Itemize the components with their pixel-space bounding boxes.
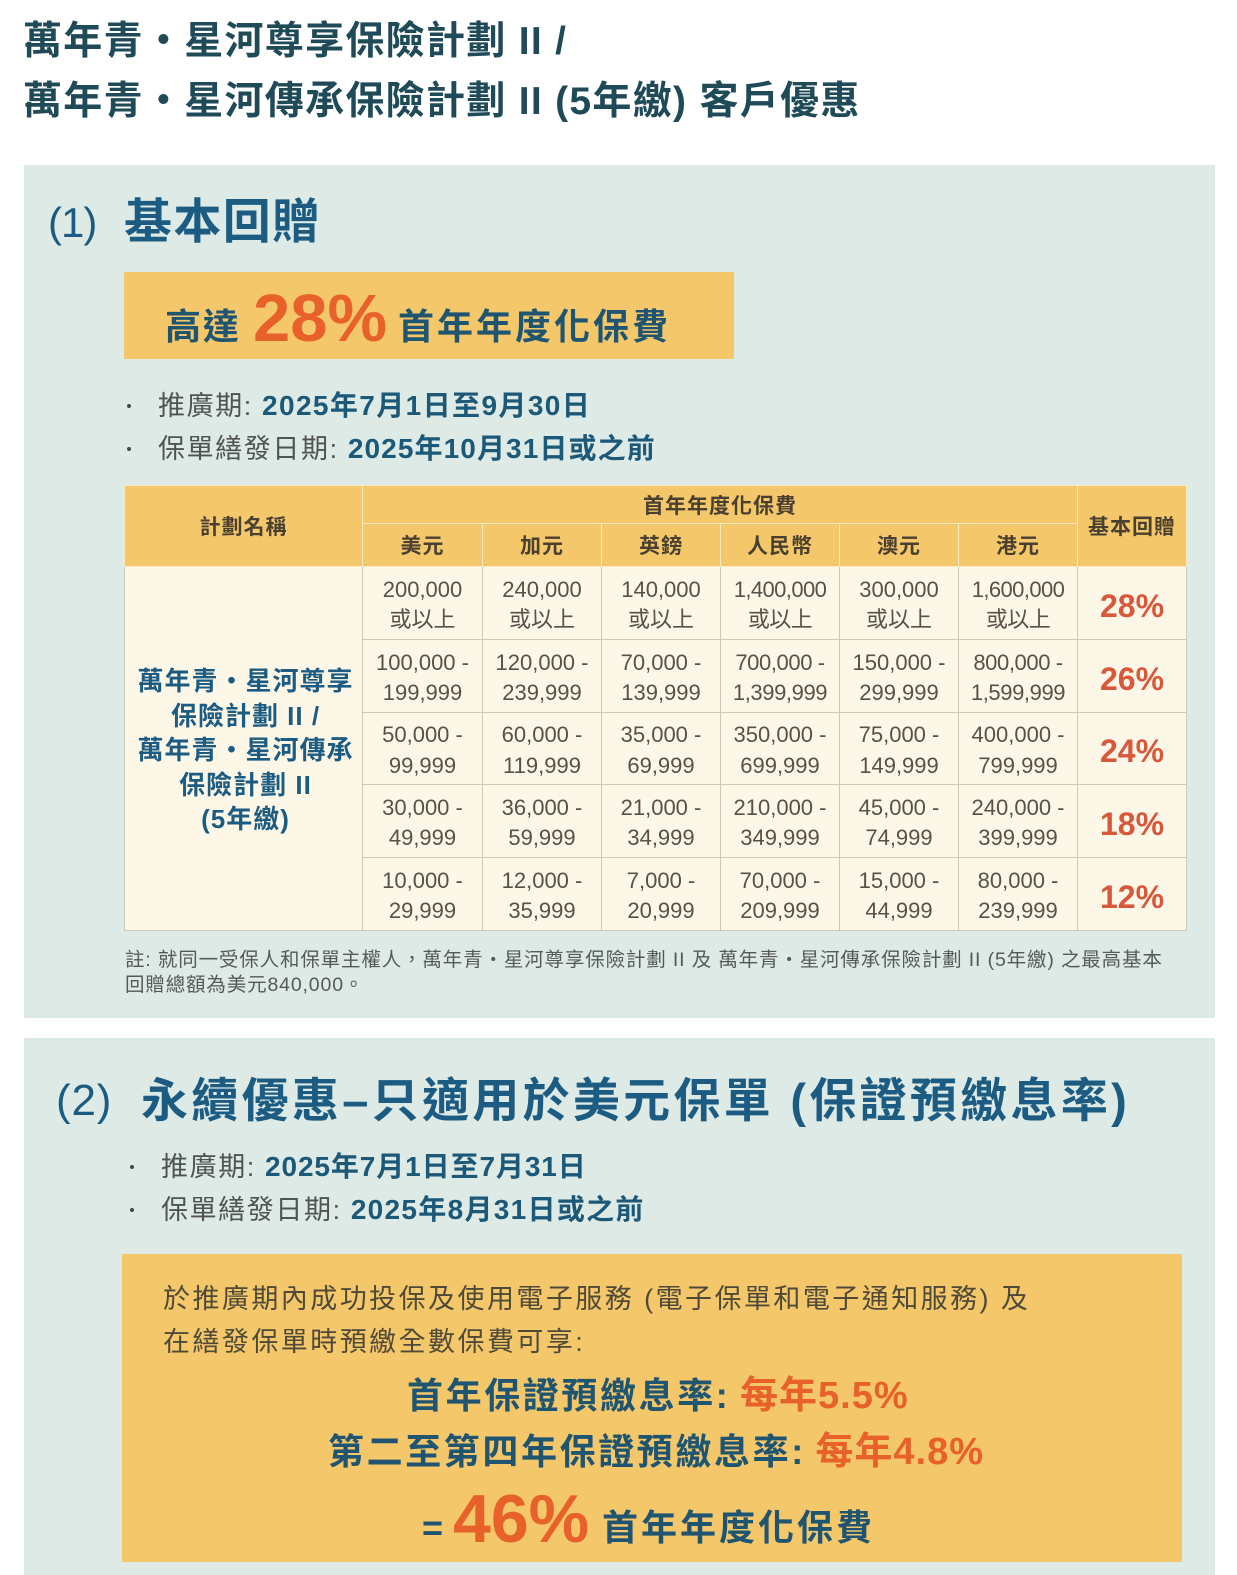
table row: 12% tier: 7,000 -: [627, 868, 695, 892]
table row: 28% tier: 1,400,000: [734, 576, 826, 602]
table row: 26% tier: 239,999: [502, 680, 582, 705]
table row: 26% tier: 26%: [1100, 661, 1164, 697]
equals sign: =: [422, 1507, 443, 1548]
table row: 28% tier: 300,000: [859, 576, 939, 602]
panel: perpetual offer: [24, 1038, 1215, 1575]
46% figure: 46%: [453, 1481, 589, 1557]
table header row 2: currencies: 澳元: [877, 535, 921, 558]
table row: 12% tier: 70,000 -: [740, 868, 820, 892]
footnote: [125, 949, 1163, 996]
table row: 28% tier: 或以上: [866, 607, 932, 632]
table row: 24% tier: 99,999: [389, 752, 456, 778]
table row: 24% tier: 119,999: [503, 752, 581, 778]
table row: 28% tier: 或以上: [389, 607, 456, 632]
table row: 26% tier: 120,000 -: [496, 650, 588, 674]
table row: 12% tier: 12%: [1100, 879, 1164, 915]
table header row 2: currencies: [363, 524, 1077, 566]
table row: 28% tier: 200,000: [383, 576, 462, 602]
table row: 18% tier: 74,999: [865, 825, 933, 850]
table row: 28% tier: 或以上: [628, 607, 694, 632]
footnote: 註: 就同一受保人和保單主權人，萬年青・星河尊享保險計劃 II 及 萬年青・星河傳承保險計劃 II (5年繳) 之最高基本: [125, 949, 1163, 971]
second to fourth year rate: 第二至第四年保證預繳息率: 每年4.8%: [328, 1431, 984, 1473]
table header row 2: currencies: 美元: [400, 535, 444, 558]
table header row 2: currencies: 英鎊: [639, 535, 683, 558]
table header row 1: 計劃名稱: [200, 516, 288, 539]
panel: basic rebate: [24, 165, 1215, 1018]
table row: 28% tier: 140,000: [621, 576, 701, 602]
callout description: [163, 1284, 1030, 1357]
heading: section 1 number: (1): [48, 199, 96, 246]
table row: 12% tier: 35,999: [508, 898, 576, 923]
bullet: promotion period: 推廣期: 2025年7月1日至7月31日: [161, 1151, 587, 1182]
table row: 26% tier: 70,000 -: [621, 650, 701, 674]
table row: 24% tier: 799,999: [978, 752, 1058, 778]
table row: 12% tier: 15,000 -: [859, 868, 939, 892]
table row: 28% tier: 或以上: [986, 607, 1050, 632]
table row: 12% tier: 44,999: [865, 898, 933, 923]
table row: 26% tier: 800,000 -: [973, 650, 1063, 674]
table row: 18% tier: 21,000 -: [621, 794, 701, 820]
table header row 1: [125, 486, 1186, 923]
table row: 28% tier: 240,000: [502, 576, 582, 602]
table row: 28% tier: 28%: [1100, 588, 1164, 624]
table row: 26% tier: 1,399,999: [733, 680, 827, 705]
table row: 12% tier: 12,000 -: [502, 868, 582, 892]
table row: 12% tier: 239,999: [978, 898, 1058, 923]
table row: 18% tier: 45,000 -: [859, 794, 939, 820]
table header row 2: currencies: 港元: [996, 535, 1040, 558]
table row: 26% tier: 199,999: [383, 680, 462, 705]
table row: 24% tier: 60,000 -: [502, 722, 582, 747]
table row: 24% tier: 75,000 -: [859, 722, 939, 747]
table row: 28% tier: 1,600,000: [972, 576, 1064, 602]
table header row 2: currencies: 加元: [520, 535, 564, 558]
table row: 28% tier: 或以上: [748, 607, 812, 632]
table row: 18% tier: 34,999: [627, 825, 695, 850]
table header row 1: 基本回贈: [1088, 516, 1176, 539]
heading: perpetual offer: 永續優惠–只適用於美元保單 (保證預繳息率): [141, 1074, 1130, 1127]
table header row 1: 萬年青・星河傳承: [137, 735, 354, 765]
table row: 24% tier: 35,000 -: [621, 722, 701, 747]
table row: 28% tier: [137, 576, 1164, 834]
callout: prepayment interest: [122, 1254, 1182, 1562]
heading: section 2 number: (2): [56, 1076, 112, 1125]
table row: 26% tier: [376, 650, 1164, 705]
table row: 18% tier: 399,999: [978, 825, 1058, 850]
bullet: policy issue date: 保單繕發日期: 2025年8月31日或之前: [161, 1194, 645, 1225]
table row: 12% tier: 10,000 -: [382, 868, 463, 892]
table row: 18% tier: 18%: [1100, 806, 1164, 842]
table row: 24% tier: 350,000 -: [734, 722, 826, 747]
table row: 24% tier: 149,999: [859, 752, 939, 778]
table row: 18% tier: 210,000 -: [734, 794, 826, 820]
title line 1: 萬年青・星河尊享保險計劃 II /: [23, 20, 567, 63]
table header row 2: currencies: 人民幣: [747, 535, 813, 558]
table row: 24% tier: 24%: [1100, 733, 1164, 769]
table row: 24% tier: 50,000 -: [382, 722, 463, 747]
callout description: 在繕發保單時預繳全數保費可享:: [163, 1327, 585, 1357]
table row: 26% tier: 1,599,999: [971, 680, 1065, 705]
table row: 18% tier: [382, 794, 1164, 850]
table header row 1: 萬年青・星河尊享: [137, 666, 354, 696]
bullet: promotion period: 推廣期: 2025年7月1日至9月30日: [158, 390, 591, 421]
table row: 12% tier: 209,999: [740, 898, 820, 923]
table row: 18% tier: 349,999: [740, 825, 820, 850]
table row: 18% tier: 59,999: [508, 825, 576, 850]
first-year rate: 首年保證預繳息率: 每年5.5%: [407, 1375, 909, 1417]
title: [23, 20, 861, 123]
table row: 26% tier: 150,000 -: [853, 650, 945, 674]
rebate table: [124, 485, 1187, 931]
table row: 24% tier: [382, 722, 1164, 778]
bullet: policy issue date: 保單繕發日期: 2025年10月31日或之前: [158, 433, 656, 464]
table row: 24% tier: 400,000 -: [972, 722, 1064, 747]
callout figure: 28%: [253, 281, 387, 356]
table header row 1: 首年年度化保費: [643, 494, 797, 518]
table row: 24% tier: 699,999: [740, 752, 820, 778]
table row: 26% tier: 139,999: [621, 680, 701, 705]
total figure line: [422, 1481, 875, 1557]
table row: 26% tier: 299,999: [859, 680, 939, 705]
title line 2: 萬年青・星河傳承保險計劃 II (5年繳) 客戶優惠: [23, 80, 861, 123]
table row: 18% tier: 30,000 -: [382, 794, 463, 820]
table row: 24% tier: 69,999: [627, 752, 695, 778]
table header row 1: 保險計劃 II: [179, 770, 312, 800]
heading: basic rebate: 基本回贈: [124, 196, 322, 249]
table row: 26% tier: 700,000 -: [735, 650, 825, 674]
table row: 18% tier: 36,000 -: [502, 794, 582, 820]
table row: 12% tier: 20,999: [627, 898, 695, 923]
callout trailing text: 首年年度化保費: [398, 306, 671, 347]
table header row 1: 保險計劃 II /: [171, 701, 320, 731]
table row: 26% tier: 100,000 -: [376, 650, 469, 674]
table row: 12% tier: 80,000 -: [978, 868, 1058, 892]
callout lead text: 高達: [165, 306, 241, 347]
table row: 18% tier: 240,000 -: [972, 794, 1064, 820]
table row: 18% tier: 49,999: [389, 825, 456, 850]
table row: 12% tier: [382, 868, 1164, 923]
table row: 28% tier: 或以上: [509, 607, 575, 632]
table row: 12% tier: 29,999: [389, 898, 456, 923]
callout: up to 28%: [124, 272, 734, 359]
footnote: 回贈總額為美元840,000。: [125, 974, 364, 996]
table header row 1: (5年繳): [201, 804, 290, 834]
callout description: 於推廣期內成功投保及使用電子服務 (電子保單和電子通知服務) 及: [163, 1284, 1030, 1314]
trailing text: 首年年度化保費: [602, 1507, 875, 1548]
